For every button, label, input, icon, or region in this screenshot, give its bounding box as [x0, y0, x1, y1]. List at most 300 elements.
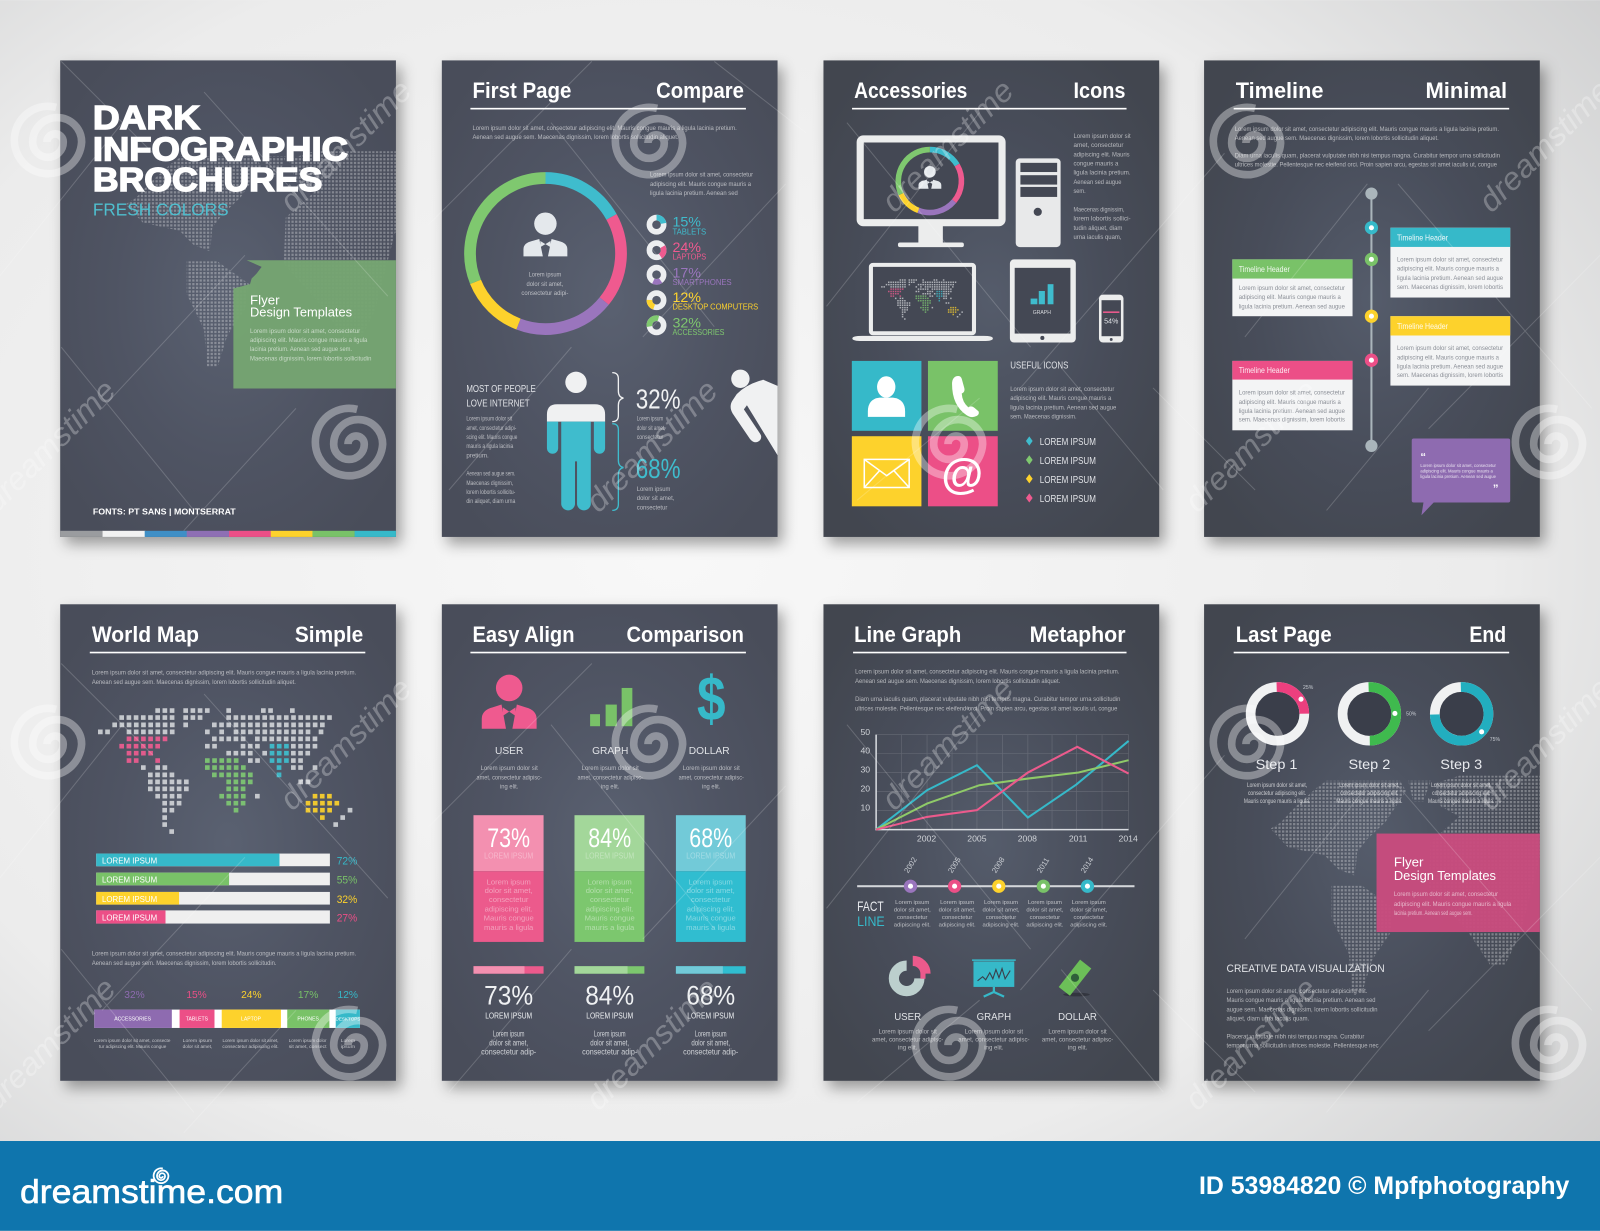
bottom stats: LOREM IPSUM	[687, 1011, 734, 1021]
creative data visualization text: Lorem ipsum dolor sit amet, consectetur adipiscing elit.	[1227, 988, 1367, 995]
icon: phone: 54%	[1104, 318, 1119, 326]
side text	[1073, 133, 1131, 241]
tile: phone	[928, 361, 998, 431]
bottom stats: Lorem ipsum	[594, 1029, 626, 1038]
watermark text: dreamstime	[578, 970, 725, 1117]
watermark text: dreamstime	[578, 372, 725, 519]
intro text	[1235, 126, 1500, 169]
speech bubble quote	[1412, 439, 1510, 515]
icon labels: USER	[894, 1012, 921, 1023]
stacked bar notes: Lorem ipsum	[183, 1038, 212, 1043]
column descriptions: ing elit.	[702, 783, 721, 790]
fact line: FACT	[857, 899, 884, 914]
percent labels	[636, 383, 681, 511]
icon: PC tower	[1016, 158, 1061, 247]
fact line: dolor sit amet,	[982, 907, 1020, 913]
intro text: Aenean sed augue sem. Maecenas dignissim, lorem lobortis sollicitudin aliquet.	[855, 678, 1060, 685]
stat card green	[574, 815, 644, 942]
stacked bar notes: Lorem ipsum dolor sit amet, consecte	[94, 1038, 171, 1043]
legend: device shares: DESKTOP COMPUTERS	[672, 302, 759, 311]
heading: First Page	[472, 78, 571, 103]
step donuts: 50%	[1406, 711, 1417, 717]
watermark text: dreamstime	[874, 72, 1021, 219]
icon: tablet	[1010, 259, 1076, 343]
timeline box teal: Lorem ipsum dolor sit amet, consectetur	[1397, 256, 1504, 263]
watermark text: dreamstime	[1177, 970, 1324, 1117]
line chart: 40	[860, 746, 870, 756]
timeline box teal: adipiscing elit. Mauris congue mauris a	[1397, 266, 1499, 273]
line chart: 10	[860, 802, 870, 812]
progress bars: LOREM IPSUM	[102, 894, 157, 904]
panel: world map simple	[60, 604, 396, 1081]
legend: device shares: TABLETS	[672, 227, 707, 236]
line chart: 2005	[967, 834, 987, 844]
intro text: Lorem ipsum dolor sit amet, consectetur adipiscing elit. Mauris congue mauris a ligula lacinia pretium.	[472, 125, 737, 132]
heading: Easy Align	[472, 622, 574, 647]
column descriptions: ing elit.	[601, 783, 619, 790]
creative data visualization text	[1227, 963, 1385, 1050]
side text: Aenean sed augue	[1073, 179, 1122, 186]
step donuts	[1251, 685, 1500, 743]
legend: device shares: 15%	[672, 215, 701, 231]
people text block: pretium.	[466, 452, 489, 459]
stat card pink: adipiscing elit.	[485, 904, 533, 913]
donut chart with person: Lorem ipsum	[529, 272, 562, 279]
stat card teal: adipiscing elit.	[687, 904, 735, 913]
people text block: Aenean sed augue sem.	[466, 471, 515, 478]
green flyer panel	[233, 260, 396, 389]
colour strip	[60, 531, 396, 537]
percent labels: dolor sit amet,	[637, 495, 675, 502]
intro text	[855, 669, 1121, 712]
step descriptions: consectetur adipiscing elit.	[1248, 790, 1306, 797]
step descriptions: consectetur adipiscing elit.	[1432, 790, 1490, 797]
tile: at sign	[928, 436, 998, 506]
stat card teal: Lorem ipsum	[689, 877, 733, 886]
bottom stats: 73%	[484, 980, 533, 1010]
icon: desktop monitor	[860, 139, 1002, 247]
stat card pink: Mauris congue	[484, 914, 534, 923]
fact line: consectetur	[1030, 915, 1060, 921]
fact line: LINE	[857, 914, 885, 929]
icon labels: amet, consectetur adipisc-	[1042, 1037, 1113, 1044]
stacked bar values: 32%	[124, 990, 145, 1001]
tile: user	[852, 361, 921, 431]
icon: green bars	[590, 688, 632, 726]
timeline box pink: adipiscing elit. Mauris congue mauris a	[1239, 399, 1341, 406]
people text block: LOVE INTERNET	[466, 398, 530, 409]
speech bubble quote: ligula lacinia pretium. Aenean sed augue	[1420, 474, 1496, 479]
icon: presentation board	[972, 959, 1016, 997]
legend: device shares: ACCESSORIES	[672, 328, 725, 337]
fact line: 2005	[946, 856, 963, 875]
green flyer panel: lacinia pretium. Aenean sed augue sem.	[250, 346, 352, 353]
bottom stats: 84%	[585, 980, 634, 1010]
pixel world map	[98, 711, 352, 832]
watermark text: dreamstime	[272, 72, 419, 219]
icon labels: Lorem ipsum dolor sit	[1048, 1028, 1107, 1035]
column labels: USER	[495, 746, 523, 757]
heading	[90, 622, 365, 653]
card shadows	[65, 68, 1545, 1088]
side text: lorem lobortis sollici-	[1073, 216, 1131, 223]
donut chart with person	[470, 178, 621, 329]
step donuts: 75%	[1490, 737, 1500, 743]
bottom stats: consectetur adip-	[481, 1047, 536, 1056]
middle text	[92, 950, 356, 967]
heading: Minimal	[1426, 78, 1507, 103]
timeline box yellow: Timeline Header	[1397, 321, 1448, 331]
bottom stats: dolor sit amet,	[489, 1039, 528, 1048]
side text: tudin aliquet, diam	[1073, 225, 1123, 232]
pink flyer panel: Flyer	[1394, 855, 1424, 870]
person figure 32/68	[547, 372, 623, 510]
dotted world map	[126, 151, 396, 366]
side text: Lorem ipsum dolor sit amet, consectetur	[650, 172, 754, 179]
green flyer panel: Flyer	[250, 292, 280, 307]
intro text: Lorem ipsum dolor sit amet, consectetur adipiscing elit. Mauris congue mauris a ligula lacinia pretium.	[855, 669, 1120, 676]
icon labels: amet, consectetur adipisc-	[958, 1037, 1030, 1044]
heading: Timeline	[1236, 78, 1323, 103]
intro text: ultrices molestie. Pellentesque nec eleifend orci. Proin sapien arcu, egestas sit amet iaculis ut, congue	[1235, 162, 1497, 169]
stacked bar notes: Lorem ipsum dolor sit amet,	[222, 1038, 279, 1043]
heading: Simple	[295, 622, 363, 647]
heading	[853, 622, 1127, 653]
creative data visualization text: tempor urna sollicitudin ultrices molestie. Pellentesque nec	[1227, 1043, 1379, 1050]
side text	[650, 172, 754, 197]
line chart: 2014	[1119, 834, 1138, 844]
people text block	[466, 384, 536, 505]
middle text: Lorem ipsum dolor sit amet, consectetur adipiscing elit. Mauris congue mauris a ligula lacinia pretium.	[92, 950, 356, 957]
percent labels: consectetur	[637, 434, 664, 441]
stat card teal: mauris a ligula	[686, 923, 736, 932]
fact line: dolor sit amet,	[1026, 907, 1064, 913]
icon labels: ing elit.	[898, 1045, 918, 1052]
pink flyer panel	[1377, 834, 1540, 932]
timeline box yellow: Lorem ipsum dolor sit amet, consectetur	[1397, 345, 1504, 352]
stat card pink	[473, 815, 544, 942]
line chart: 2002	[917, 834, 936, 844]
timeline box yellow: sem. Maecenas dignissim, lorem lobortis	[1397, 372, 1504, 379]
pink flyer panel: Lorem ipsum dolor sit amet, consectetur	[1394, 891, 1499, 898]
stacked bar notes: consectetur adipiscing elit.	[222, 1044, 279, 1049]
people text block: amet, consectetur adipi-	[466, 425, 516, 432]
stacked bar notes: sit amet, consect	[289, 1044, 327, 1049]
line chart: 20	[860, 784, 870, 794]
people text block: MOST OF PEOPLE	[466, 384, 536, 395]
stat card pink: mauris a ligula	[484, 923, 534, 932]
progress bars: 32%	[337, 894, 358, 906]
intro text: Lorem ipsum dolor sit amet, consectetur adipiscing elit. Mauris congue mauris a ligula lacinia pretium.	[1235, 126, 1499, 133]
stat card pink: Lorem ipsum	[487, 877, 531, 886]
timeline box teal: sem. Maecenas dignissim, lorem lobortis	[1397, 284, 1504, 291]
people text block: scing elit. Mauris congue	[466, 434, 518, 441]
stat card green: consectetur	[590, 895, 630, 904]
stat card green: Mauris congue	[585, 914, 635, 923]
fact line: Lorem ipsum	[1072, 900, 1106, 906]
small bars	[473, 966, 746, 974]
panel: timeline minimal	[1204, 60, 1540, 537]
step descriptions: Lorem ipsum dolor sit amet,	[1339, 782, 1400, 789]
stacked bar values	[124, 990, 358, 1001]
bottom stats	[481, 980, 739, 1056]
panel: easy align comparison	[442, 604, 778, 1081]
step descriptions: Lorem ipsum dolor sit amet,	[1247, 782, 1307, 789]
fact line: Lorem ipsum	[1028, 900, 1062, 906]
bottom stats: 68%	[686, 980, 735, 1010]
stacked bar	[94, 1010, 360, 1028]
legend: device shares: 12%	[672, 290, 701, 306]
bottom stats: LOREM IPSUM	[485, 1011, 532, 1021]
useful icons text: sem. Maecenas dignissim.	[1010, 414, 1077, 421]
column descriptions: Lorem ipsum dolor sit	[683, 765, 740, 772]
bullet list: LOREM IPSUM	[1040, 437, 1096, 448]
intro text: Diam urna iaculis quam, placerat vulputate nibh nisi tempus magna. Curabitur tempor urna sollicitudin	[1235, 152, 1500, 159]
fact line: consectetur	[986, 915, 1016, 921]
speech bubble quote: adipiscing elit. Mauris congue mauris a	[1420, 469, 1493, 474]
step labels: Step 1	[1256, 757, 1298, 773]
people text block: lorem lobortis sollicitu-	[466, 489, 515, 496]
icon: phone	[1099, 295, 1123, 343]
percent labels: 68%	[636, 453, 681, 484]
green flyer panel: adipiscing elit. Mauris congue mauris a ligula	[250, 337, 368, 344]
bottom stats: dolor sit amet,	[691, 1039, 730, 1048]
icon: laptop with map	[852, 265, 993, 341]
icon labels: ing elit.	[984, 1045, 1004, 1052]
progress bars: 27%	[337, 913, 358, 925]
step labels: Step 3	[1440, 757, 1482, 773]
timeline box teal	[1390, 228, 1510, 298]
legend: device shares	[647, 215, 759, 337]
progress bars: LOREM IPSUM	[102, 855, 157, 865]
heading: Last Page	[1236, 622, 1332, 647]
icon: puzzle donut	[894, 961, 926, 991]
fact line: consectetur	[942, 915, 972, 921]
people text block: mauris a ligula lacinia	[466, 443, 513, 450]
useful icons text: USEFUL ICONS	[1010, 361, 1069, 372]
step descriptions: Lorem ipsum dolor sit amet,	[1431, 782, 1491, 789]
panel: line graph metaphor	[823, 604, 1159, 1081]
timeline box pink	[1232, 361, 1353, 430]
side text: sem.	[1073, 188, 1086, 195]
stat card green: mauris a ligula	[585, 923, 635, 932]
stat card pink: LOREM IPSUM	[484, 850, 533, 860]
pink flyer panel: Design Templates	[1394, 868, 1496, 883]
bottom stats: dolor sit amet,	[590, 1039, 629, 1048]
column labels	[495, 746, 730, 757]
column descriptions	[477, 765, 744, 790]
fact line: Lorem ipsum	[940, 900, 974, 906]
percent labels: 32%	[636, 383, 681, 414]
icon labels: ing elit.	[1068, 1045, 1088, 1052]
column descriptions: amet, consectetur adipisc-	[477, 774, 542, 781]
heading: Compare	[656, 78, 744, 103]
fact line: adipiscing elit.	[939, 923, 976, 929]
stacked bar values: 15%	[186, 990, 207, 1001]
stacked bar notes: dolor sit amet,	[183, 1044, 212, 1049]
green flyer panel: Design Templates	[250, 305, 352, 320]
heading	[852, 78, 1127, 109]
footer credit: ID 53984820 © Mpfphotography	[1199, 1172, 1569, 1200]
stat card pink: 73%	[487, 823, 530, 853]
icon labels: amet, consectetur adipisc-	[872, 1037, 943, 1044]
side text: adipiscing elit. Mauris	[1073, 151, 1130, 158]
step descriptions: Mauris congue mauris a ligula.	[1336, 798, 1403, 805]
heading: Line Graph	[854, 622, 961, 647]
progress bars	[96, 854, 358, 925]
main title: BROCHURES	[93, 162, 322, 199]
column descriptions: amet, consectetur adipisc-	[578, 774, 643, 781]
fact line: Lorem ipsum	[895, 900, 929, 906]
legend: device shares: 17%	[672, 266, 701, 282]
fact line: Lorem ipsum	[984, 900, 1018, 906]
timeline box green: Lorem ipsum dolor sit amet, consectetur	[1239, 285, 1346, 292]
step labels	[1256, 757, 1482, 773]
step labels: Step 2	[1348, 757, 1390, 773]
panel: first page compare	[442, 60, 778, 537]
timeline box teal: Timeline Header	[1397, 233, 1448, 243]
line chart: 2011	[1069, 834, 1088, 844]
timeline box green: adipiscing elit. Mauris congue mauris a	[1239, 294, 1341, 301]
side text: congue mauris a	[1073, 161, 1119, 168]
icon: teal dollar: $	[697, 665, 726, 735]
fact line: 2011	[1035, 856, 1051, 875]
progress bars: LOREM IPSUM	[102, 913, 157, 923]
people text block: Maecenas dignissim,	[466, 480, 513, 487]
side text: Lorem ipsum dolor sit	[1073, 133, 1131, 140]
fact line: dolor sit amet,	[939, 907, 976, 913]
bullet list: LOREM IPSUM	[1040, 475, 1096, 486]
bullet list	[1026, 436, 1096, 505]
fact line: adipiscing elit.	[1070, 923, 1108, 929]
bullet list: LOREM IPSUM	[1040, 494, 1096, 505]
footer logo: dreamstime.com	[20, 1174, 283, 1211]
stacked bar notes: ipsum	[341, 1044, 355, 1049]
stat card teal: Mauris congue	[686, 914, 736, 923]
green flyer panel: Lorem ipsum dolor sit amet, consectetur	[250, 328, 361, 335]
useful icons text: adipiscing elit. Mauris congue mauris a	[1010, 395, 1111, 402]
heading: Metaphor	[1030, 622, 1126, 647]
timeline box yellow: adipiscing elit. Mauris congue mauris a	[1397, 354, 1499, 361]
stacked bar notes	[94, 1038, 355, 1049]
step descriptions: Mauris congue mauris a ligula.	[1428, 798, 1495, 805]
useful icons text	[1010, 361, 1117, 421]
intro text: Aenean sed augue sem. Maecenas dignissim, lorem lobortis sollicitudin aliquet.	[472, 134, 679, 141]
timeline box green: ligula lacinia pretium. Aenean sed augue	[1239, 303, 1345, 310]
stacked bar: ACCESSORIES	[114, 1017, 152, 1023]
fact line: dolor sit amet,	[1070, 907, 1108, 913]
panel: last page end	[1204, 604, 1540, 1081]
cropped person icon	[731, 370, 778, 455]
bottom stats: LOREM IPSUM	[586, 1011, 633, 1021]
progress bars: LOREM IPSUM	[102, 875, 157, 885]
stat card green: Lorem ipsum	[588, 877, 632, 886]
legend: device shares: SMARTPHONES	[672, 278, 732, 287]
icon: dollar bill	[1059, 960, 1091, 996]
creative data visualization text: aliquet, diam urna iaculis quam.	[1227, 1016, 1309, 1023]
watermark spirals	[14, 106, 1583, 1077]
heading	[470, 78, 746, 109]
bottom stats: consectetur adip-	[582, 1047, 637, 1056]
stacked bar values: 12%	[338, 990, 358, 1001]
fact line: adipiscing elit.	[982, 923, 1020, 929]
watermark text: dreamstime	[1177, 372, 1324, 519]
fact line: consectetur	[897, 915, 928, 921]
stacked bar notes: tur adipiscing elit. Mauris congue	[99, 1044, 167, 1049]
people text block: din aliquet, diam urna	[466, 498, 516, 505]
green flyer panel: Maecenas dignissim, lorem lobortis sollicitudin	[250, 355, 372, 362]
stat card teal: 68%	[689, 823, 732, 853]
intro text	[92, 670, 356, 686]
bottom stats: Lorem ipsum	[695, 1029, 727, 1038]
timeline box green: Timeline Header	[1239, 264, 1290, 274]
timeline box pink: ligula lacinia pretium. Aenean sed augue	[1239, 408, 1345, 415]
stacked bar: PHONES	[297, 1017, 320, 1023]
useful icons text: Lorem ipsum dolor sit amet, consectetur	[1010, 386, 1115, 393]
middle text: Aenean sed augue sem. Maecenas dignissim, lorem lobortis sollicitudin.	[92, 960, 277, 967]
line chart: 2008	[1018, 834, 1037, 844]
intro text: Diam urna iaculis quam, placerat vulputate nibh nisi tempus magna. Curabitur tempor urna sollicitudin	[855, 696, 1121, 703]
watermark text: dreamstime	[874, 670, 1021, 817]
timeline box teal: ligula lacinia pretium. Aenean sed augue	[1397, 275, 1503, 282]
stat card teal: dolor sit amet,	[687, 886, 735, 895]
heading	[1234, 78, 1509, 109]
speech bubble quote: Lorem ipsum dolor sit amet, consectetur	[1420, 463, 1496, 468]
icon: pink user	[482, 675, 537, 729]
timeline box yellow: ligula lacinia pretium. Aenean sed augue	[1397, 364, 1503, 371]
panel: accessories icons	[823, 60, 1159, 537]
percent labels: Lorem ipsum	[637, 416, 664, 423]
stacked bar: LAPTOP	[241, 1017, 262, 1023]
pink flyer panel: adipiscing elit. Mauris congue mauris a ligula	[1394, 901, 1511, 908]
legend: device shares: LAPTOPS	[672, 252, 707, 261]
step descriptions	[1244, 782, 1495, 805]
percent labels: Lorem ipsum	[637, 486, 671, 493]
stacked bar notes: Lorem	[341, 1038, 355, 1043]
stacked bar values: 17%	[298, 990, 318, 1001]
donut chart with person: dolor sit amet,	[527, 281, 563, 288]
timeline box pink: Lorem ipsum dolor sit amet, consectetur	[1239, 390, 1346, 397]
fact line	[857, 855, 1134, 929]
pink flyer panel: lacinia pretium. Aenean sed augue sem.	[1394, 910, 1473, 917]
fact line: 2014	[1079, 855, 1096, 875]
intro text: ultrices molestie. Pellentesque nec eleifend orci. Proin sapien arcu, egestas sit amet iaculis ut, congue	[855, 705, 1118, 712]
stat card teal: LOREM IPSUM	[686, 850, 735, 860]
heading	[1234, 622, 1509, 653]
heading: World Map	[92, 622, 199, 647]
side text: amet, consectetur	[1073, 142, 1124, 149]
column labels: GRAPH	[592, 746, 628, 757]
stat card green: adipiscing elit.	[586, 904, 634, 913]
line chart	[860, 727, 1138, 844]
bottom stats: Lorem ipsum	[493, 1029, 525, 1038]
dotted world map	[1271, 776, 1540, 991]
side text: urna iaculis quam,	[1073, 234, 1122, 241]
percent labels: consectetur	[637, 504, 668, 511]
fact line: adipiscing elit.	[1026, 923, 1064, 929]
stacked bar: DESKTOPS	[336, 1017, 360, 1022]
icon labels: DOLLAR	[1058, 1012, 1097, 1023]
heading: Accessories	[854, 78, 967, 103]
tile: at sign: @	[941, 450, 983, 498]
stacked bar notes: Lorem ipsum dolor	[289, 1038, 327, 1043]
subtitle: FRESH COLORS	[93, 200, 229, 220]
column labels: DOLLAR	[689, 746, 730, 757]
fact line: 2002	[902, 856, 919, 875]
stat card green: 84%	[588, 823, 631, 853]
progress bars: 55%	[337, 875, 358, 887]
fonts note: FONTS: PT SANS | MONTSERRAT	[93, 506, 236, 516]
